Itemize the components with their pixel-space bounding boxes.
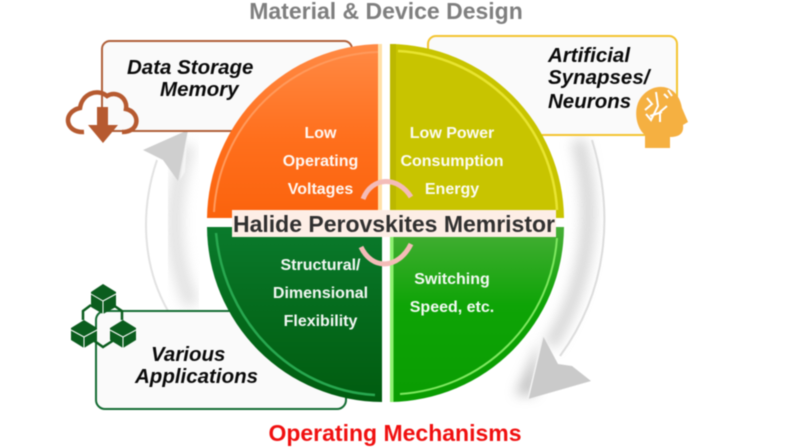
panel: Various Applications	[96, 311, 346, 409]
center arrow: top	[363, 181, 411, 199]
quadrant text: Low Power Consumption Energy: Energy	[425, 181, 479, 198]
label: Data Storage Memory: Memory	[160, 78, 240, 101]
quadrant text: Low Power Consumption Energy: Consumption	[400, 153, 504, 170]
label: Various Applications: Applications	[134, 365, 258, 388]
panel: Artificial Synapses/Neurons	[428, 36, 677, 135]
quadrant text: Switching Speed, etc.: Switching	[414, 271, 490, 288]
quadrant text: Switching Speed, etc.: Speed, etc.	[410, 299, 494, 316]
center label: Halide Perovskites Memristor: Halide Perovskites Memristor	[233, 211, 555, 237]
label: Artificial Synapses/Neurons: Artificial	[547, 44, 631, 67]
arrow: upper left circular arrow	[143, 130, 192, 311]
icon: connected cubes	[71, 284, 136, 348]
pie chart: four quadrants	[207, 44, 564, 402]
quadrant text: Low Power Consumption Energy: Low Power	[410, 125, 494, 142]
quadrant text: Structural/Dimensional Flexibility: Structural/	[280, 257, 361, 274]
icon: cloud download	[68, 92, 136, 143]
icon: brain head	[636, 87, 688, 148]
center arrow: bottom	[361, 244, 411, 264]
quadrant: dark green, flexibility	[207, 227, 382, 402]
label: Data Storage Memory: Data Storage	[127, 56, 253, 79]
quadrant: olive, low power consumption	[390, 44, 564, 218]
quadrant text: Structural/Dimensional Flexibility: Flexibility	[284, 313, 358, 330]
heading: Operating Mechanisms: Operating Mechanisms	[268, 420, 522, 446]
arrow: lower right circular arrow	[515, 140, 604, 399]
label: Artificial Synapses/Neurons: Synapses/	[548, 66, 652, 89]
quadrant text: Low Operating Voltages: Voltages	[288, 181, 353, 198]
label: Artificial Synapses/Neurons: Neurons	[548, 90, 631, 113]
quadrant text: Low Operating Voltages: Low	[304, 125, 337, 142]
quadrant text: Low Operating Voltages: Operating	[283, 153, 358, 170]
quadrant: bright green, switching speed	[390, 227, 564, 402]
panel: Data Storage Memory	[102, 41, 352, 131]
label: Various Applications: Various	[151, 343, 225, 366]
quadrant text: Structural/Dimensional Flexibility: Dimensional	[273, 285, 368, 302]
quadrant: orange, low operating voltages	[207, 44, 382, 218]
